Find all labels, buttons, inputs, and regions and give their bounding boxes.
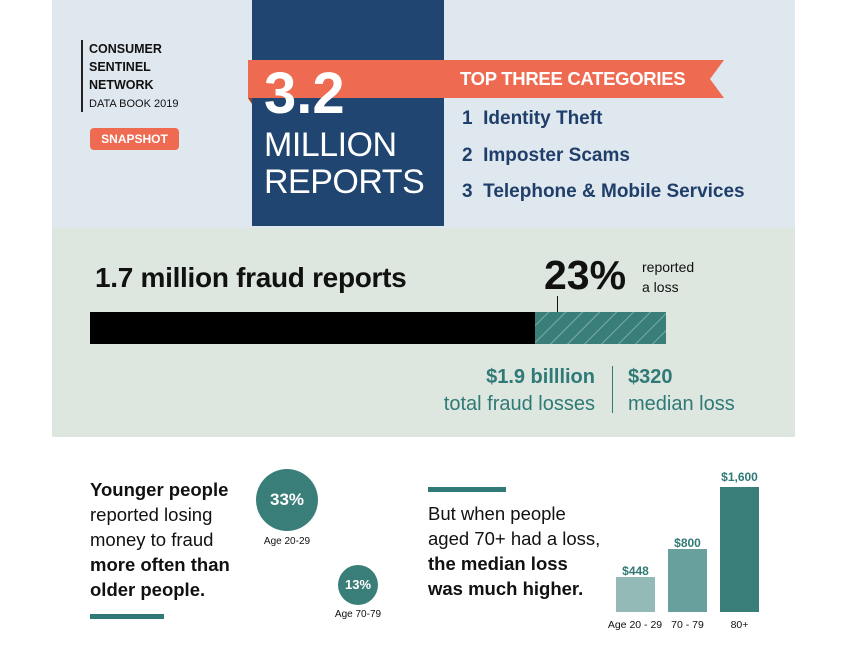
bar chart: median loss by age: $800 [674, 536, 701, 550]
snapshot badge [90, 128, 179, 150]
text block: younger: more often than [90, 554, 230, 575]
text: But when people [428, 503, 566, 524]
panel: fraud reports: reported [642, 259, 694, 275]
total losses: $1.9 billlion [486, 366, 595, 388]
text block: younger: older people. [90, 579, 205, 600]
top categories list: 1 Identity Theft [462, 108, 602, 129]
title block: SENTINEL [89, 60, 151, 74]
text block: younger: Younger people [90, 479, 228, 500]
median loss: $320 [628, 366, 672, 388]
total losses [444, 366, 595, 415]
text: aged 70+ had a loss, [428, 528, 600, 549]
bar chart: median loss by age: 70 - 79 [671, 619, 704, 631]
bar chart: median loss by age: $1,600 [721, 470, 758, 484]
stat 23%: 23% [544, 252, 626, 298]
title block: CONSUMER [89, 42, 162, 56]
text: was much higher. [428, 578, 583, 599]
bar chart: median loss by age [608, 470, 759, 631]
circle 13%: 13% [345, 577, 371, 592]
title block: DATA BOOK 2019 [89, 98, 178, 110]
text block: younger: money to fraud [90, 529, 213, 550]
text: Age 70-79 [335, 609, 381, 620]
heading: 1.7 million fraud reports [95, 262, 406, 293]
circle 33%: 33% [270, 490, 304, 509]
panel: fraud reports [52, 228, 795, 437]
text block: older [428, 487, 506, 492]
ribbon [248, 60, 724, 104]
median loss: median loss [628, 393, 735, 415]
snapshot badge: SNAPSHOT [101, 132, 168, 146]
panel: header band [52, 0, 795, 228]
top categories list [462, 108, 745, 202]
total losses: total fraud losses [444, 393, 595, 415]
top categories list: 3 Telephone & Mobile Services [462, 181, 745, 202]
panel: fraud reports: a loss [642, 279, 679, 295]
ribbon text: TOP THREE CATEGORIES [460, 68, 685, 89]
title block: NETWORK [89, 78, 154, 92]
top categories list: 2 Imposter Scams [462, 144, 630, 166]
circle 33% [256, 469, 318, 531]
million reports [264, 126, 424, 201]
navy box [252, 0, 444, 226]
million reports: MILLION [264, 126, 397, 164]
circle 13% [338, 565, 378, 605]
median loss [628, 366, 735, 415]
text: Age 20-29 [264, 536, 310, 547]
million reports: REPORTS [264, 163, 424, 201]
bar chart [90, 312, 666, 344]
text block: younger: reported losing [90, 504, 212, 525]
text: the median loss [428, 553, 568, 574]
bar chart: median loss by age: Age 20 - 29 [608, 619, 662, 631]
title block [81, 40, 201, 112]
bar chart: median loss by age: $448 [622, 564, 649, 578]
big number: 3.2 [264, 61, 345, 126]
bar chart: median loss by age: 80+ [731, 619, 748, 631]
text block: younger [90, 479, 230, 600]
